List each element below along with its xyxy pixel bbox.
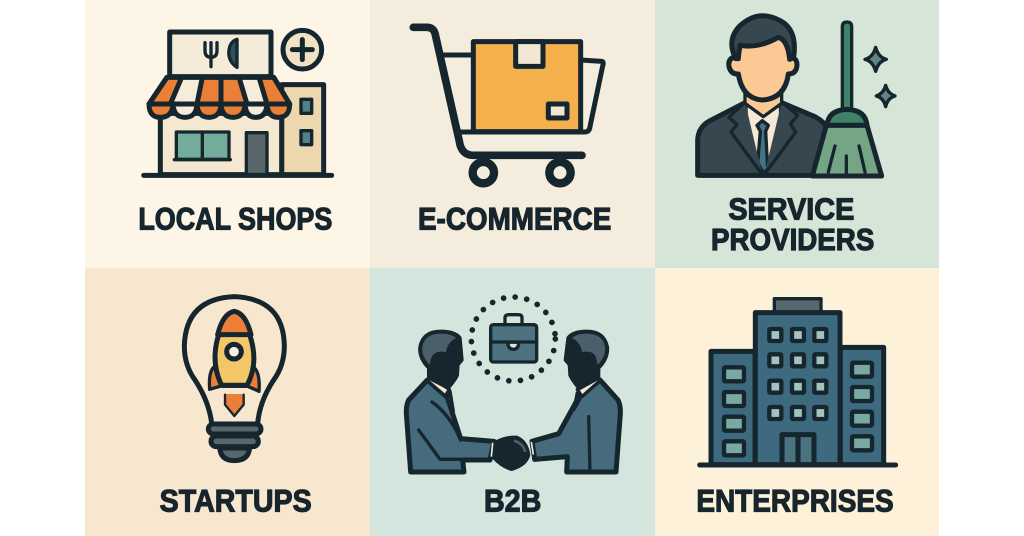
heading: local shops: LOCAL SHOPS [138, 202, 332, 237]
panel: enterprises [655, 268, 939, 536]
heading: enterprises: ENTERPRISES [696, 483, 894, 518]
icon: clasped hands [491, 437, 533, 469]
icon: shop storefront [144, 30, 332, 175]
icon: lightbulb with rocket [184, 297, 284, 461]
heading: startups: STARTUPS [160, 483, 312, 518]
heading: b2b: B2B [484, 483, 541, 518]
heading: service providers [711, 192, 874, 257]
panel: service providers [655, 0, 939, 268]
icon: shopping cart with box [413, 27, 603, 183]
icon: dotted circle [471, 297, 555, 381]
icon: businessman with broom [698, 16, 895, 176]
icon: business handshake with briefcase [406, 297, 620, 472]
icon: office buildings [700, 299, 896, 465]
panel: local shops [85, 0, 370, 268]
right businessman [532, 331, 620, 472]
heading: service providers: PROVIDERS [711, 223, 874, 257]
panel: startups [85, 268, 370, 536]
left businessman [406, 331, 494, 472]
icon: briefcase [491, 315, 537, 362]
heading: service providers: SERVICE [728, 192, 854, 226]
panel: e-commerce [370, 0, 655, 268]
center windows [769, 329, 826, 419]
side windows [724, 363, 872, 455]
heading: e-commerce: E-COMMERCE [418, 202, 611, 237]
panel: b2b [370, 268, 655, 536]
